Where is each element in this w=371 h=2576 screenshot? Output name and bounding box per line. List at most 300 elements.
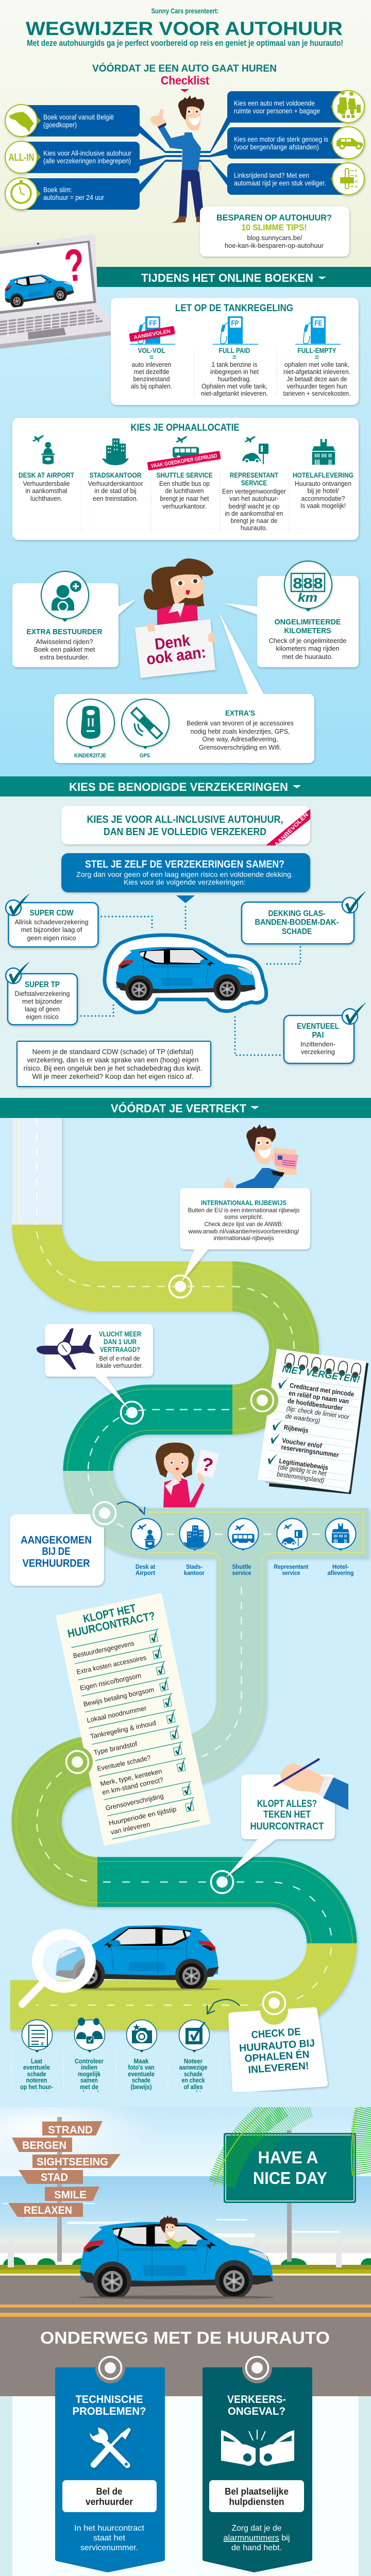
card: traffic accident: ONGEVAL? bbox=[228, 2405, 285, 2417]
box: glass and tyre cover: SCHADE bbox=[282, 927, 312, 936]
icon: fuel pump FE: FE bbox=[314, 319, 323, 328]
icon: report: x bbox=[41, 2041, 44, 2047]
panel: right checklist 1: ruimte voor personen + bagage bbox=[234, 107, 320, 115]
signpost: STRAND bbox=[48, 2124, 93, 2136]
box: super tp: Diefstalverzekering bbox=[14, 990, 70, 997]
column: vol-vol: VOL-VOL bbox=[138, 346, 165, 354]
step text 2 bbox=[74, 2057, 104, 2097]
illustration: man with thumb up bbox=[150, 95, 211, 223]
icon: odometer km bbox=[284, 561, 332, 612]
road sign: have a nice day bbox=[224, 2130, 356, 2262]
contract checklist: KLOPT HET bbox=[82, 1602, 137, 1625]
column: hotelaflevering: accommodatie? bbox=[301, 495, 345, 502]
box: super tp: SUPER TP bbox=[25, 980, 60, 989]
contract checklist: Eventuele schade? bbox=[96, 1754, 151, 1773]
contract checklist: Lokaal noodnummer bbox=[86, 1704, 147, 1724]
step text 1 bbox=[20, 2057, 53, 2097]
notebook: do not forget bbox=[246, 1349, 368, 1494]
contract checklist: Bestuurdersgegevens bbox=[72, 1639, 135, 1659]
card: technical problems: staat het bbox=[93, 2534, 126, 2543]
location choice icons: Shuttle bbox=[232, 1563, 251, 1570]
signpost: RELAXEN bbox=[24, 2205, 72, 2216]
column: desk at airport: Verhuurdersbalie bbox=[23, 480, 70, 487]
signpost: SIGHTSEEING bbox=[37, 2156, 108, 2168]
panel: left checklist 2: (alle verzekeringen inbegrepen) bbox=[43, 157, 131, 165]
panel: right checklist 2 bbox=[227, 127, 364, 159]
box: PAI: PAI bbox=[312, 1031, 324, 1040]
location choice icons: Representant bbox=[274, 1563, 309, 1570]
callout: save on car rental: hoe-kan-ik-besparen-op-autohuur bbox=[225, 242, 324, 249]
callout: international license: Buiten de EU is een internationaal rijbewijs bbox=[188, 1207, 300, 1214]
panel: extras: KINDERZITJE bbox=[74, 753, 106, 759]
pin bbox=[169, 1276, 192, 1297]
panel: white background for road help bbox=[12, 2396, 359, 2576]
column: full paid: niet-afgetankt inleveren. bbox=[201, 389, 268, 397]
step text 3: (bewijs) bbox=[131, 2083, 151, 2091]
column: shuttle service: SHUTTLE SERVICE bbox=[157, 471, 212, 479]
column: vol-vol bbox=[131, 346, 172, 390]
road sign: have a nice day: HAVE A bbox=[258, 2148, 318, 2167]
panel: extras: GPS bbox=[140, 753, 150, 759]
panel: right checklist 3 bbox=[227, 163, 364, 195]
column: full paid: huurbedrag. bbox=[217, 375, 251, 383]
box: excess note: risico. Bij een ongeluk ben je het schadebedrag dus kwijt. bbox=[24, 1064, 202, 1072]
panel: unlimited kilometers: ONGELIMITEERDE bbox=[274, 618, 341, 626]
icon: hotel bbox=[312, 439, 335, 465]
icon: extra driver bbox=[41, 571, 89, 622]
pin bbox=[211, 1871, 233, 1893]
panel: extras: One way, Adresaflevering, bbox=[202, 735, 278, 743]
callout: sign the contract: KLOPT ALLES? bbox=[257, 1799, 317, 1809]
card: traffic accident: alarmnummers bij bbox=[224, 2534, 290, 2543]
step text 1: noteren bbox=[26, 2076, 47, 2084]
road sign: have a nice day: NICE DAY bbox=[253, 2168, 327, 2188]
card: check the rental car bbox=[228, 1992, 328, 2093]
step text 2: mogelijk bbox=[78, 2070, 101, 2078]
icon: two people bbox=[74, 2018, 105, 2053]
banner: online booking bbox=[95, 267, 371, 287]
panel: right checklist 2: Kies een motor die sterk genoeg is bbox=[234, 135, 328, 143]
step text 4: of alles bbox=[183, 2083, 203, 2091]
sign bbox=[135, 619, 216, 678]
column: representant service: Een vertegenwoordiger bbox=[222, 487, 286, 495]
panel: left checklist 2: Kies voor All-inclusive autohuur bbox=[43, 149, 131, 157]
card: check the rental car: HUURAUTO BIJ bbox=[239, 2038, 315, 2054]
step text 1: Laat bbox=[31, 2057, 43, 2065]
step text 4: werkt bbox=[185, 2089, 201, 2097]
callout: delayed flight bbox=[37, 1324, 153, 1409]
illustration: car with blue outline bbox=[105, 935, 266, 1012]
box: super tp bbox=[6, 961, 77, 1025]
panel: fuel policy: LET OP DE TANKREGELING bbox=[175, 303, 293, 314]
box: arrived at rental company: AANGEKOMEN bbox=[21, 1534, 92, 1546]
contract checklist: Type brandstof bbox=[93, 1740, 138, 1756]
panel: left checklist 3 bbox=[5, 178, 140, 210]
illustration: car with magnifier bbox=[22, 1925, 222, 2004]
step text 1: contract bbox=[26, 2089, 48, 2097]
panel: extras: EXTRA'S bbox=[225, 709, 255, 718]
column: full-empty: = bbox=[315, 353, 319, 361]
icon: camera bbox=[127, 2020, 157, 2053]
box: super tp: met bijzonder bbox=[22, 997, 63, 1005]
panel: left checklist 1: (goedkoper) bbox=[43, 121, 77, 129]
illustration: woman with question bbox=[156, 1443, 219, 1507]
step text 4: Noteer bbox=[184, 2057, 203, 2065]
card: technical problems: PROBLEMEN? bbox=[72, 2405, 146, 2417]
section heading: before renting: Checklist bbox=[161, 74, 209, 87]
banner: online booking: TIJDENS HET ONLINE BOEKEN bbox=[141, 272, 313, 284]
signpost: SMILE bbox=[54, 2189, 87, 2201]
panel: pickup location bbox=[12, 418, 359, 540]
contract checklist: Merk, type, kenteken bbox=[99, 1767, 163, 1788]
icon: fuel pump FF bbox=[130, 316, 175, 345]
illustration: woman with question: ? bbox=[199, 1453, 215, 1476]
icon: shuttle bbox=[173, 436, 199, 460]
box: excess note bbox=[17, 1041, 211, 1087]
column: desk at airport: luchthaven. bbox=[30, 495, 62, 502]
panel: extras bbox=[54, 612, 314, 763]
heading: on the road: ONDERWEG MET DE HUURAUTO bbox=[40, 2328, 330, 2347]
column: shuttle service: Een shuttle bus op bbox=[159, 480, 210, 487]
location choice icons: aflevering bbox=[328, 1569, 353, 1577]
banner: insurance bbox=[0, 776, 371, 796]
column: shuttle service: brengt je naar het bbox=[160, 495, 209, 502]
pin bbox=[121, 1401, 143, 1424]
box: excess note: Neem je de standaard CDW (schade) of TP (diefstal) bbox=[32, 1047, 194, 1056]
step text 3 bbox=[128, 2057, 155, 2091]
box: glass and tyre cover: BANDEN-BODEM-DAK- bbox=[255, 918, 339, 927]
card: traffic accident: Bel plaatselijke bbox=[225, 2486, 289, 2497]
column: hotelaflevering: HOTELAFLEVERING bbox=[293, 471, 353, 479]
badge: recommended bbox=[129, 326, 175, 342]
box: excess note: verzekering, dan is er vaak sprake van een (hoog) eigen bbox=[27, 1056, 199, 1064]
icon: desk bbox=[131, 1519, 162, 1549]
icon: wrench and screwdriver bbox=[90, 2428, 131, 2466]
column: stadskantoor: in de stad of bij bbox=[95, 487, 137, 495]
step text 3: foto's van bbox=[128, 2063, 155, 2071]
presenter line: Sunny Cars presenteert: bbox=[151, 7, 218, 15]
callout: international license: www.anwb.nl/vakantie/reisvoorbereiding/ bbox=[188, 1228, 299, 1235]
step text 1: eventuele bbox=[23, 2063, 50, 2071]
callout: delayed flight: lokale verhuurder. bbox=[96, 1362, 143, 1369]
panel: right checklist 3: D bbox=[355, 180, 358, 184]
location choice icons: Desk at bbox=[136, 1563, 155, 1570]
location choice icons: kantoor bbox=[184, 1569, 205, 1577]
contract checklist: Huurperiode en tijdstip bbox=[108, 1805, 177, 1827]
panel: right checklist 1: Kies een auto met voldoende bbox=[234, 99, 315, 107]
road: final stretch bbox=[10, 1943, 332, 2005]
green cutout with pin bbox=[246, 1384, 278, 1416]
road: lime stretch bbox=[37, 1225, 232, 1286]
callout: save on car rental: 10 SLIMME TIPS! bbox=[241, 223, 307, 232]
sign: ook aan: bbox=[145, 643, 207, 668]
icon: GPS satellite bbox=[122, 699, 169, 749]
panel: unlimited kilometers bbox=[225, 561, 359, 667]
card: technical problems: verhuurder bbox=[86, 2497, 133, 2507]
notebook: do not forget: Creditcard met pincode bbox=[289, 1381, 355, 1398]
callout: international license: Check deze lijst van de ANWB: bbox=[204, 1221, 283, 1228]
box: super cdw: Allrisk schadeverzekering bbox=[14, 918, 89, 926]
box: arrived at rental company: BIJ DE bbox=[42, 1546, 70, 1557]
column: hotelaflevering: Is vaak mogelijk! bbox=[300, 502, 346, 510]
notebook: do not forget: NIET VERGETEN! bbox=[281, 1364, 361, 1385]
panel: pickup location: KIES JE OPHAALLOCATIE bbox=[131, 422, 239, 433]
card: technical problems: Bel de bbox=[96, 2486, 123, 2497]
notebook: do not forget: en reliëf op naam van bbox=[288, 1389, 349, 1405]
scene: beach road bbox=[0, 2107, 371, 2317]
card: traffic accident bbox=[203, 2353, 312, 2572]
box: super cdw: SUPER CDW bbox=[30, 909, 74, 918]
column: representant service: REPRESENTANT bbox=[230, 471, 278, 479]
column: representant service: SERVICE bbox=[241, 479, 267, 487]
winding road bbox=[10, 1108, 368, 2005]
step text 4 bbox=[179, 2057, 207, 2097]
card: technical problems: In het huurcontract bbox=[74, 2524, 145, 2533]
contract checklist: van inleveren bbox=[110, 1820, 151, 1836]
notebook: do not forget: de hoofdbestuurder bbox=[287, 1397, 343, 1412]
panel: right checklist 3: P bbox=[355, 169, 358, 173]
icon: airport desk bbox=[32, 435, 55, 464]
panel: compose insurance yourself: Zorg dan voor geen of een laag eigen risico en voldoende dekking. bbox=[76, 870, 293, 878]
magnifier bbox=[22, 1934, 91, 2004]
notebook: do not forget: Rijbewijs bbox=[283, 1423, 309, 1434]
icon: representative bbox=[242, 436, 268, 464]
column: vol-vol: = bbox=[149, 353, 154, 361]
column: shuttle service: verhuurkantoor. bbox=[162, 502, 207, 510]
icon: fuel pump FF: FF bbox=[149, 319, 157, 328]
step text 3: eventuele bbox=[128, 2070, 155, 2078]
badge: often cheaper: VAAK GOEDKOPER GEPRIJSD bbox=[150, 453, 218, 469]
illustration: laptop with car: ? bbox=[62, 239, 87, 292]
panel: extra driver: extra bestuurder. bbox=[40, 653, 89, 661]
column: full paid: = bbox=[232, 353, 237, 361]
notebook: do not forget: Legitimatiebewijs bbox=[279, 1457, 329, 1471]
signpost bbox=[8, 2117, 121, 2262]
column: full-empty: niet-afgetankt inleveren. bbox=[283, 368, 350, 376]
card: check the rental car: INLEVEREN! bbox=[248, 2060, 309, 2076]
road: departure stretch bbox=[12, 1108, 62, 1225]
panel: right checklist 3: R bbox=[355, 174, 358, 178]
illustration: man with license bbox=[224, 1124, 298, 1196]
contract checklist: Grensoverschrijding bbox=[105, 1792, 164, 1812]
box: arrived at rental company bbox=[10, 1514, 104, 1586]
step text 2: indien bbox=[81, 2063, 97, 2071]
card: technical problems bbox=[55, 2353, 165, 2572]
column: desk at airport bbox=[19, 471, 74, 502]
notebook: do not forget: (tip: check de limiet voor bbox=[286, 1404, 350, 1421]
icon: child seat bbox=[67, 699, 114, 749]
panel: unlimited kilometers: KILOMETERS bbox=[284, 626, 331, 635]
panel: extras: Bedenk van tevoren of je accessoires bbox=[187, 719, 294, 727]
panel: left checklist 1: Boek vooraf vanuit België bbox=[43, 113, 114, 121]
column: full-empty: verhuurder tegen hun bbox=[286, 382, 347, 390]
notebook: do not forget: reserveringsnummer bbox=[281, 1443, 340, 1459]
column: stadskantoor bbox=[88, 471, 143, 502]
notebook: do not forget: Voucher en/of bbox=[281, 1436, 323, 1450]
panel: compose insurance yourself bbox=[61, 853, 310, 892]
banner: insurance: KIES DE BENODIGDE VERZEKERINGEN bbox=[69, 781, 288, 793]
callout: save on car rental: BESPAREN OP AUTOHUUR? bbox=[216, 213, 332, 223]
box: glass and tyre cover: DEKKING GLAS- bbox=[268, 909, 326, 918]
panel: unlimited kilometers: kilometers mag rijden bbox=[276, 645, 339, 652]
panel: fuel policy bbox=[111, 298, 359, 405]
location choice icons: Hotel- bbox=[332, 1563, 349, 1570]
icon: plane with clock bbox=[37, 1328, 95, 1369]
panel: right checklist 2: (voor bergen/lange afstanden) bbox=[234, 143, 319, 151]
column: full paid: FULL PAID bbox=[218, 346, 250, 354]
palm fronds bbox=[0, 2092, 371, 2186]
step text 4: en check bbox=[181, 2076, 205, 2084]
callout: international license: internationaal-rijbewijs bbox=[213, 1234, 274, 1242]
step text 1: op het huur- bbox=[20, 2083, 53, 2091]
header bbox=[26, 7, 343, 48]
panel: right checklist 3: automaat rijd je een stuk veiliger. bbox=[234, 179, 326, 187]
panel: right checklist 3: N bbox=[355, 185, 358, 189]
box: arrived at rental company: VERHUURDER bbox=[23, 1557, 90, 1569]
driver bbox=[160, 2215, 187, 2249]
dotted connectors bbox=[81, 907, 300, 1055]
card: traffic accident: Zorg dat je de bbox=[232, 2524, 282, 2533]
box: glass and tyre cover bbox=[242, 891, 366, 944]
location choice icons: service bbox=[232, 1569, 251, 1577]
panel: extras: nodig hebt zoals kinderzitjes, GPS, bbox=[191, 727, 290, 735]
column: full paid bbox=[201, 346, 268, 397]
section heading: before renting bbox=[92, 63, 277, 92]
icon: report bbox=[22, 2020, 53, 2053]
box: excess note: Wil je meer zekerheid? Koop dan het eigen risico af. bbox=[32, 1072, 194, 1080]
callout: international license: INTERNATIONAAL RIJBEWIJS bbox=[201, 1199, 286, 1207]
icon: fuel pump FP: FP bbox=[231, 319, 239, 328]
panel: right checklist 3: Linksrijdend land? Met een bbox=[234, 171, 309, 179]
badge: recommended: AANBEVOLEN bbox=[133, 329, 171, 341]
panel: all-inclusive recommendation bbox=[61, 806, 310, 848]
road: green return bbox=[37, 1760, 97, 1882]
illustration: woman with sign bbox=[135, 558, 216, 678]
callout: save on car rental bbox=[200, 207, 349, 257]
panel: extras: Grensoverschrijding en Wifi. bbox=[199, 743, 281, 751]
road: teal bend bbox=[88, 1410, 232, 1471]
column: representant service: huurauto. bbox=[241, 524, 267, 532]
illustration: hand with pen bbox=[273, 1759, 348, 1810]
column: vol-vol: auto inleveren bbox=[132, 361, 171, 368]
signpost: STAD bbox=[41, 2172, 68, 2183]
column: hotelaflevering: Huurauto ontvangen bbox=[295, 480, 351, 487]
section heading: before renting: VÓÓRDAT JE EEN AUTO GAAT HUREN bbox=[92, 63, 277, 74]
column: representant service bbox=[222, 471, 286, 532]
contract checklist: en km-stand correct? bbox=[102, 1776, 164, 1797]
panel: unlimited kilometers: met de huurauto. bbox=[282, 653, 333, 660]
step text 3: Maak bbox=[134, 2057, 149, 2065]
column: stadskantoor: STADSKANTOOR bbox=[90, 471, 141, 479]
location choice icons: Stads- bbox=[186, 1563, 203, 1570]
location choice icons: Airport bbox=[136, 1569, 155, 1577]
callout: delayed flight: Bel of e-mail de bbox=[99, 1354, 140, 1362]
column: representant service: bedrijf wacht je op bbox=[229, 502, 279, 510]
contract checklist: Tankregeling & inhoud bbox=[90, 1719, 157, 1740]
icon: fuel pump FE bbox=[295, 316, 341, 345]
panel: right checklist 1 bbox=[227, 91, 364, 123]
panel: left checklist 3: Boek slim: bbox=[43, 185, 72, 194]
column: representant service: van het autohuur- bbox=[229, 495, 279, 502]
pin bbox=[90, 1499, 119, 1528]
panel: left checklist 3: autohuur = per 24 uur bbox=[43, 193, 104, 201]
box: super cdw: geen eigen risico bbox=[27, 934, 76, 942]
step text 2: samen bbox=[80, 2076, 98, 2084]
callout: delayed flight: DAN 1 UUR bbox=[104, 1337, 137, 1346]
callout: save on car rental: blog.sunnycars.be/ bbox=[247, 234, 302, 242]
step text 2: met de bbox=[80, 2083, 98, 2091]
column: hotelaflevering: bij je hotel/ bbox=[307, 487, 339, 495]
callout: sign the contract: TEKEN HET bbox=[263, 1809, 311, 1820]
panel: extra driver: Afwisselend rijden? bbox=[36, 638, 93, 646]
panel: extra driver bbox=[12, 571, 136, 667]
contract checklist: Bewijs betaling borgsom bbox=[82, 1686, 155, 1708]
box: super cdw bbox=[6, 893, 98, 947]
column: full paid: inbegrepen in het bbox=[210, 368, 259, 376]
panel: left checklist 2 bbox=[5, 141, 140, 173]
panel: compose insurance yourself: STEL JE ZELF DE VERZEKERINGEN SAMEN? bbox=[85, 859, 284, 870]
illustration: laptop with car bbox=[0, 234, 123, 349]
step text 1: schade bbox=[27, 2070, 46, 2078]
sign: Denk bbox=[154, 631, 192, 653]
callout: sign the contract bbox=[226, 1759, 348, 1878]
column: vol-vol: met dezelfde bbox=[134, 368, 169, 376]
banner: before departure: VÓÓRDAT JE VERTREKT bbox=[111, 1102, 247, 1115]
column: desk at airport: DESK AT AIRPORT bbox=[19, 471, 74, 479]
road: teal return bbox=[97, 1882, 332, 1943]
step text 2: verhuurder bbox=[74, 2089, 104, 2097]
ribbon: recommended bbox=[266, 809, 310, 848]
notebook: do not forget: (die geldig is in het bbox=[278, 1463, 327, 1478]
box: PAI bbox=[284, 1002, 366, 1063]
column: shuttle service bbox=[157, 471, 212, 510]
box: PAI: EVENTUEEL bbox=[297, 1022, 339, 1031]
column: full-empty: Je betaalt deze aan de bbox=[286, 375, 347, 383]
column: vol-vol: benzinestand bbox=[133, 375, 170, 383]
column: desk at airport: in aankomsthal bbox=[26, 487, 68, 495]
column: stadskantoor: Verhuurderskantoor bbox=[88, 480, 143, 487]
icon: hotel bbox=[326, 1519, 356, 1549]
ribbon: recommended: AANBEVOLEN bbox=[273, 811, 310, 848]
card: check the rental car: CHECK DE bbox=[251, 2026, 301, 2041]
callout: international license: soms verplicht. bbox=[224, 1213, 263, 1221]
icon: fuel pump FP bbox=[213, 316, 258, 345]
connectors from panels to man bbox=[140, 117, 230, 193]
icon: shuttle bbox=[228, 1519, 259, 1549]
icon: odometer km: km bbox=[298, 591, 317, 605]
notebook: do not forget: de waarborg) bbox=[285, 1412, 321, 1425]
icon: representative bbox=[277, 1519, 307, 1549]
card: check the rental car: OPHALEN ÉN bbox=[244, 2048, 310, 2064]
column: full paid: 1 tank benzine is bbox=[211, 361, 258, 368]
column: shuttle service: de luchthaven bbox=[165, 487, 204, 495]
step text 2: Controleer bbox=[75, 2057, 104, 2065]
notebook: do not forget: bestemmingsland) bbox=[276, 1470, 325, 1484]
panel: compose insurance yourself: Kies voor de volgende verzekeringen: bbox=[124, 878, 246, 886]
step text 4: schade bbox=[184, 2070, 203, 2078]
column: full-empty: FULL-EMPTY bbox=[298, 346, 336, 354]
box: super tp: laag of geen bbox=[25, 1005, 60, 1013]
panel: all-inclusive recommendation: KIES JE VOOR ALL-INCLUSIVE AUTOHUUR, bbox=[87, 814, 283, 825]
column: hotelaflevering bbox=[293, 471, 353, 510]
box: super cdw: met bijzonder laag of bbox=[21, 926, 82, 934]
icon: city office bbox=[102, 438, 129, 465]
card: technical problems: TECHNISCHE bbox=[75, 2394, 143, 2405]
column: stadskantoor: een treinstation. bbox=[93, 495, 138, 502]
card: technical problems: servicenummer. bbox=[80, 2544, 138, 2552]
step text 3: schade bbox=[132, 2076, 150, 2084]
icon: city bbox=[179, 1519, 210, 1549]
